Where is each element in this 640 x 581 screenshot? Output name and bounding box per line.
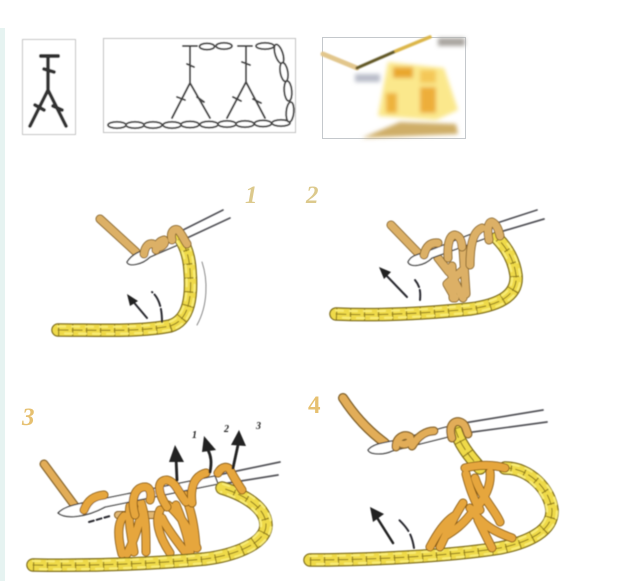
yarn loops on hook bbox=[396, 422, 468, 447]
chain stitches, upper part bbox=[455, 428, 480, 468]
yarn strand bbox=[391, 225, 420, 255]
arrow labels bbox=[192, 421, 261, 441]
yarn strand bbox=[100, 219, 136, 252]
yarn loops on hook bbox=[84, 467, 242, 515]
chain stitches bbox=[310, 464, 557, 564]
dashed arrow bbox=[415, 280, 420, 300]
chart: tall stitch symbols bbox=[172, 46, 265, 118]
arrow 2 bbox=[202, 436, 216, 472]
tall stitch bbox=[430, 465, 512, 548]
back strand bbox=[118, 511, 160, 519]
figure: step 2 bbox=[336, 210, 544, 318]
number: step 3: 3 bbox=[21, 404, 34, 431]
arrow 3 bbox=[231, 430, 246, 468]
panel: crochet chart bbox=[104, 38, 296, 132]
arrow bbox=[370, 507, 393, 543]
chain stitches bbox=[58, 236, 195, 334]
bracket bbox=[197, 262, 206, 325]
yarn loops on hook bbox=[424, 222, 500, 265]
number: step 4: 4 bbox=[308, 392, 321, 419]
hook bbox=[58, 462, 280, 517]
arrow labels: 2 bbox=[223, 424, 229, 435]
dashed arrow bbox=[397, 518, 414, 548]
tall stitches bbox=[119, 494, 197, 554]
hook bbox=[127, 210, 230, 265]
dashed line bbox=[89, 516, 110, 522]
photo: hook and yarn bbox=[323, 37, 430, 68]
yarn strand bbox=[343, 398, 385, 443]
figure: step 3 bbox=[33, 421, 280, 569]
arrow bbox=[379, 267, 407, 297]
icon: double crochet symbol bbox=[30, 56, 66, 126]
dashed arrow bbox=[152, 292, 162, 322]
photo: yellow swatch bbox=[355, 38, 465, 138]
arrow labels: 3 bbox=[255, 421, 261, 432]
panel: stitch symbol bbox=[22, 40, 76, 134]
hook bbox=[408, 210, 544, 265]
yarn loops on hook bbox=[144, 229, 187, 254]
chart: chain ovals bbox=[108, 43, 295, 128]
number: step 2: 2 bbox=[305, 182, 318, 209]
figure: step 4 bbox=[310, 398, 557, 564]
figure: step 1 bbox=[58, 210, 230, 334]
arrow 1 bbox=[169, 445, 184, 480]
tall stitch bbox=[438, 248, 466, 298]
yarn strand bbox=[44, 464, 78, 510]
arrow bbox=[127, 294, 147, 318]
chain stitches bbox=[336, 235, 520, 318]
arrow labels: 1 bbox=[192, 430, 197, 441]
number: step 1: 1 bbox=[245, 182, 258, 209]
panel: photo of crochet swatch bbox=[322, 37, 466, 138]
hook bbox=[368, 410, 547, 454]
chain stitches bbox=[33, 484, 271, 569]
